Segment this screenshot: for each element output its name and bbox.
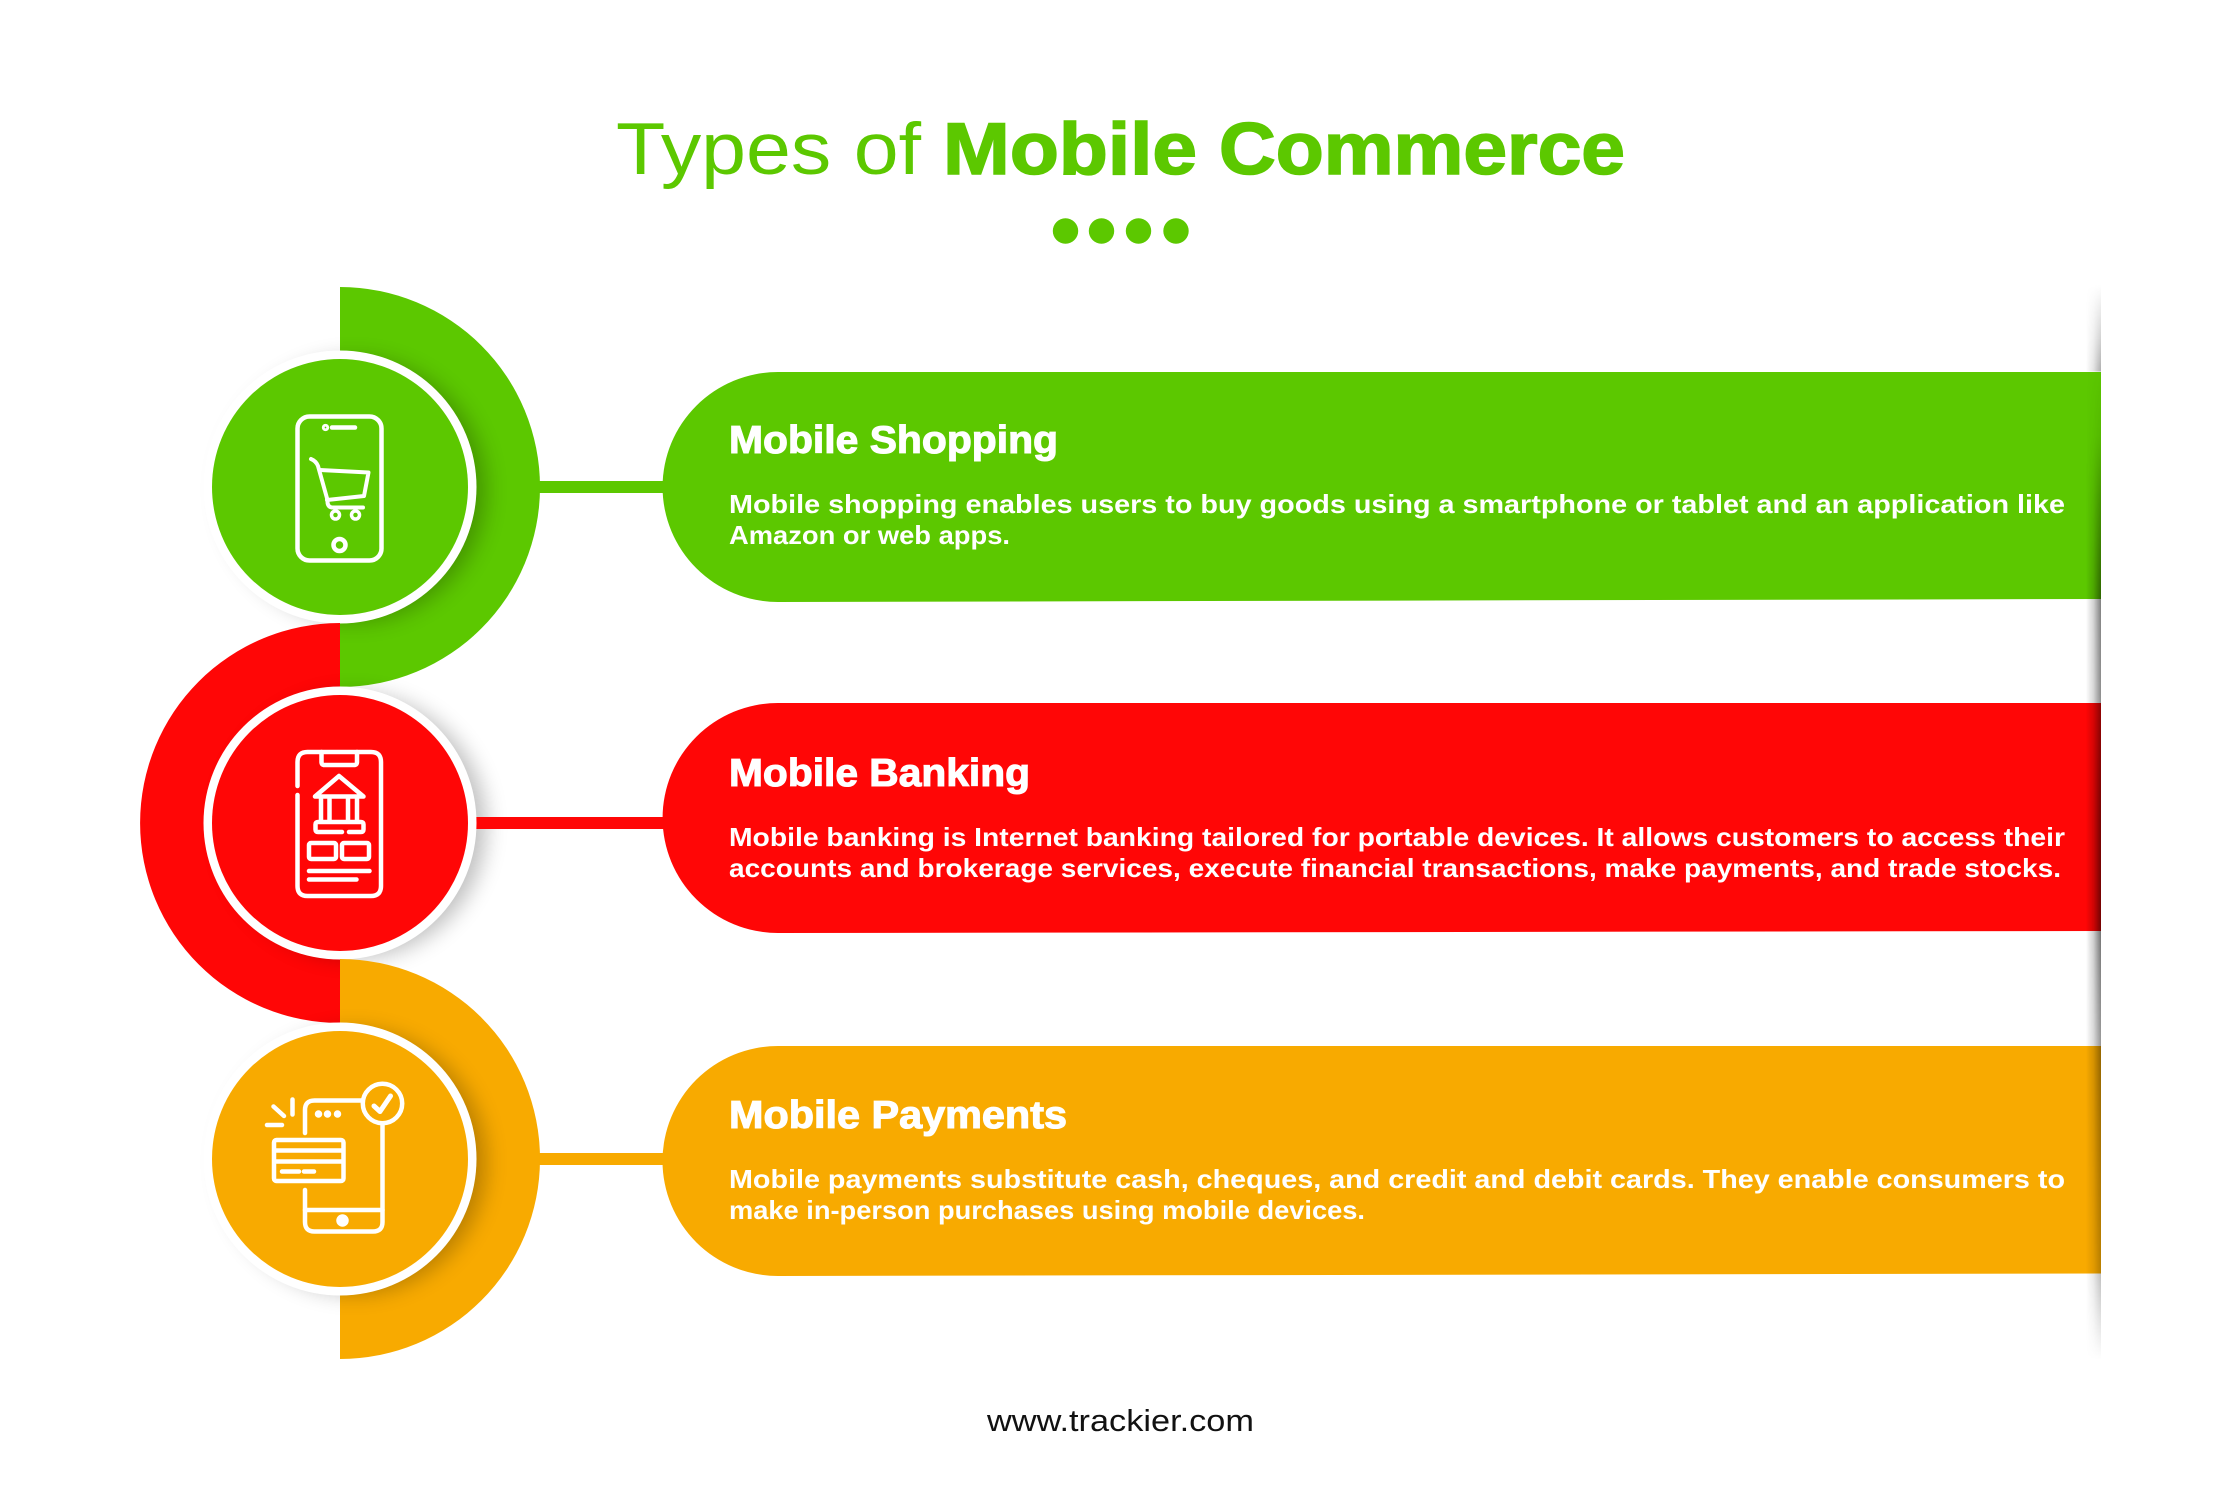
connector: green xyxy=(535,481,670,493)
icon: phone with card and check xyxy=(267,1084,402,1232)
ring shadow: green xyxy=(222,358,486,622)
icon: phone with bank xyxy=(298,752,381,896)
title dots xyxy=(1053,218,1189,244)
text: mobile shopping description xyxy=(729,489,2065,550)
text: mobile banking description: accounts and brokerage services, execute financial transactions, make payments, and trade stocks. xyxy=(729,853,2061,883)
text: mobile payments description: make in-person purchases using mobile devices. xyxy=(729,1195,1365,1225)
half ring: amber xyxy=(340,959,540,1359)
white ring: amber xyxy=(204,1022,476,1296)
row: mobile shopping xyxy=(204,287,2101,687)
white ring: red xyxy=(204,686,476,960)
half ring: green xyxy=(340,287,540,687)
heading: mobile shopping: Mobile Shopping xyxy=(729,419,1058,462)
text: mobile banking description: Mobile banking is Internet banking tailored for portable devices. It allows customers to access their xyxy=(729,822,2065,852)
white ring: green xyxy=(204,350,476,624)
half ring: red xyxy=(140,623,340,1023)
icon disc: red xyxy=(212,695,468,951)
banner: mobile banking xyxy=(663,703,2101,933)
ring shadow: amber xyxy=(222,1030,486,1294)
icon disc: amber xyxy=(212,1031,468,1287)
connector: red xyxy=(470,817,670,829)
ring shadow: red xyxy=(222,694,486,958)
title: Types of xyxy=(616,109,922,190)
text: mobile shopping description: Amazon or web apps. xyxy=(729,520,1010,550)
text: mobile payments description xyxy=(729,1164,2065,1225)
connector: amber xyxy=(535,1153,670,1165)
footer url: www.trackier.com xyxy=(986,1403,1254,1438)
text: mobile shopping description: Mobile shopping enables users to buy goods using a smartphone or tablet and an application like xyxy=(729,489,2065,519)
row: mobile banking xyxy=(140,623,2101,1023)
title xyxy=(616,109,1625,190)
title: Mobile xyxy=(943,109,1197,190)
text: mobile payments description: Mobile payments substitute cash, cheques, and credit and debit cards. They enable consumers to xyxy=(729,1164,2065,1194)
heading: mobile payments: Mobile Payments xyxy=(729,1094,1067,1137)
icon: phone with cart xyxy=(298,416,382,560)
banner: mobile payments xyxy=(662,1046,2101,1276)
row: mobile payments xyxy=(204,959,2101,1359)
title: Commerce xyxy=(1219,109,1625,190)
text: mobile banking description xyxy=(729,822,2065,883)
icon disc: green xyxy=(212,359,468,615)
heading: mobile banking: Mobile Banking xyxy=(729,752,1030,795)
banner: mobile shopping xyxy=(663,372,2101,602)
